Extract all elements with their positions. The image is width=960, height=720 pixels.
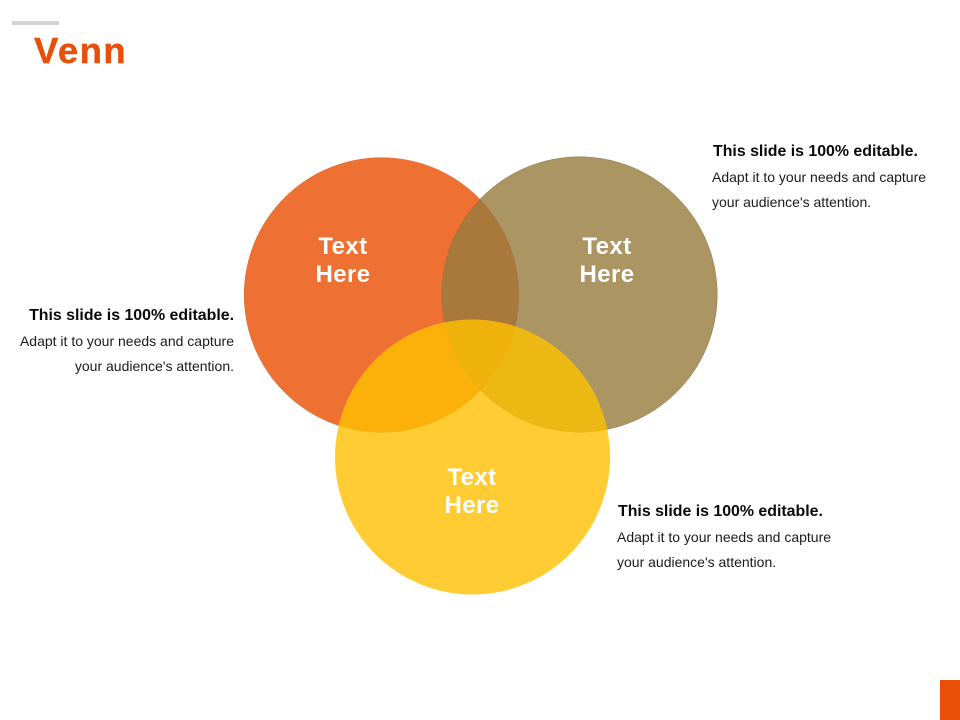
corner accent block [940,680,960,720]
title: Venn [34,30,127,71]
callout: bottom right: your audience's attention. [617,554,776,570]
callout: top right: Adapt it to your needs and capture [712,169,926,185]
callout: top right: This slide is 100% editable. [713,143,918,160]
callout: left: Adapt it to your needs and capture [20,333,234,349]
circle: orange [244,158,519,432]
title accent bar [12,21,59,25]
callout: top right: your audience's attention. [712,194,871,210]
callout: bottom right: Adapt it to your needs and capture [617,529,831,545]
circle: yellow [335,320,610,594]
circle label: tan: Here [580,261,634,288]
circle: tan [442,157,717,432]
circle label: orange: Text [318,233,368,260]
circle label: yellow: Here [445,492,499,519]
callout: left [20,307,234,374]
callout: bottom right [617,503,831,570]
callout: left: your audience's attention. [75,358,234,374]
callout: left: This slide is 100% editable. [29,307,234,324]
circle label: tan: Text [582,233,632,260]
circle label: yellow: Text [447,464,497,491]
circle label: orange: Here [316,261,370,288]
venn diagram [244,157,717,595]
callout: top right [712,143,926,210]
callout: bottom right: This slide is 100% editable. [618,503,823,520]
